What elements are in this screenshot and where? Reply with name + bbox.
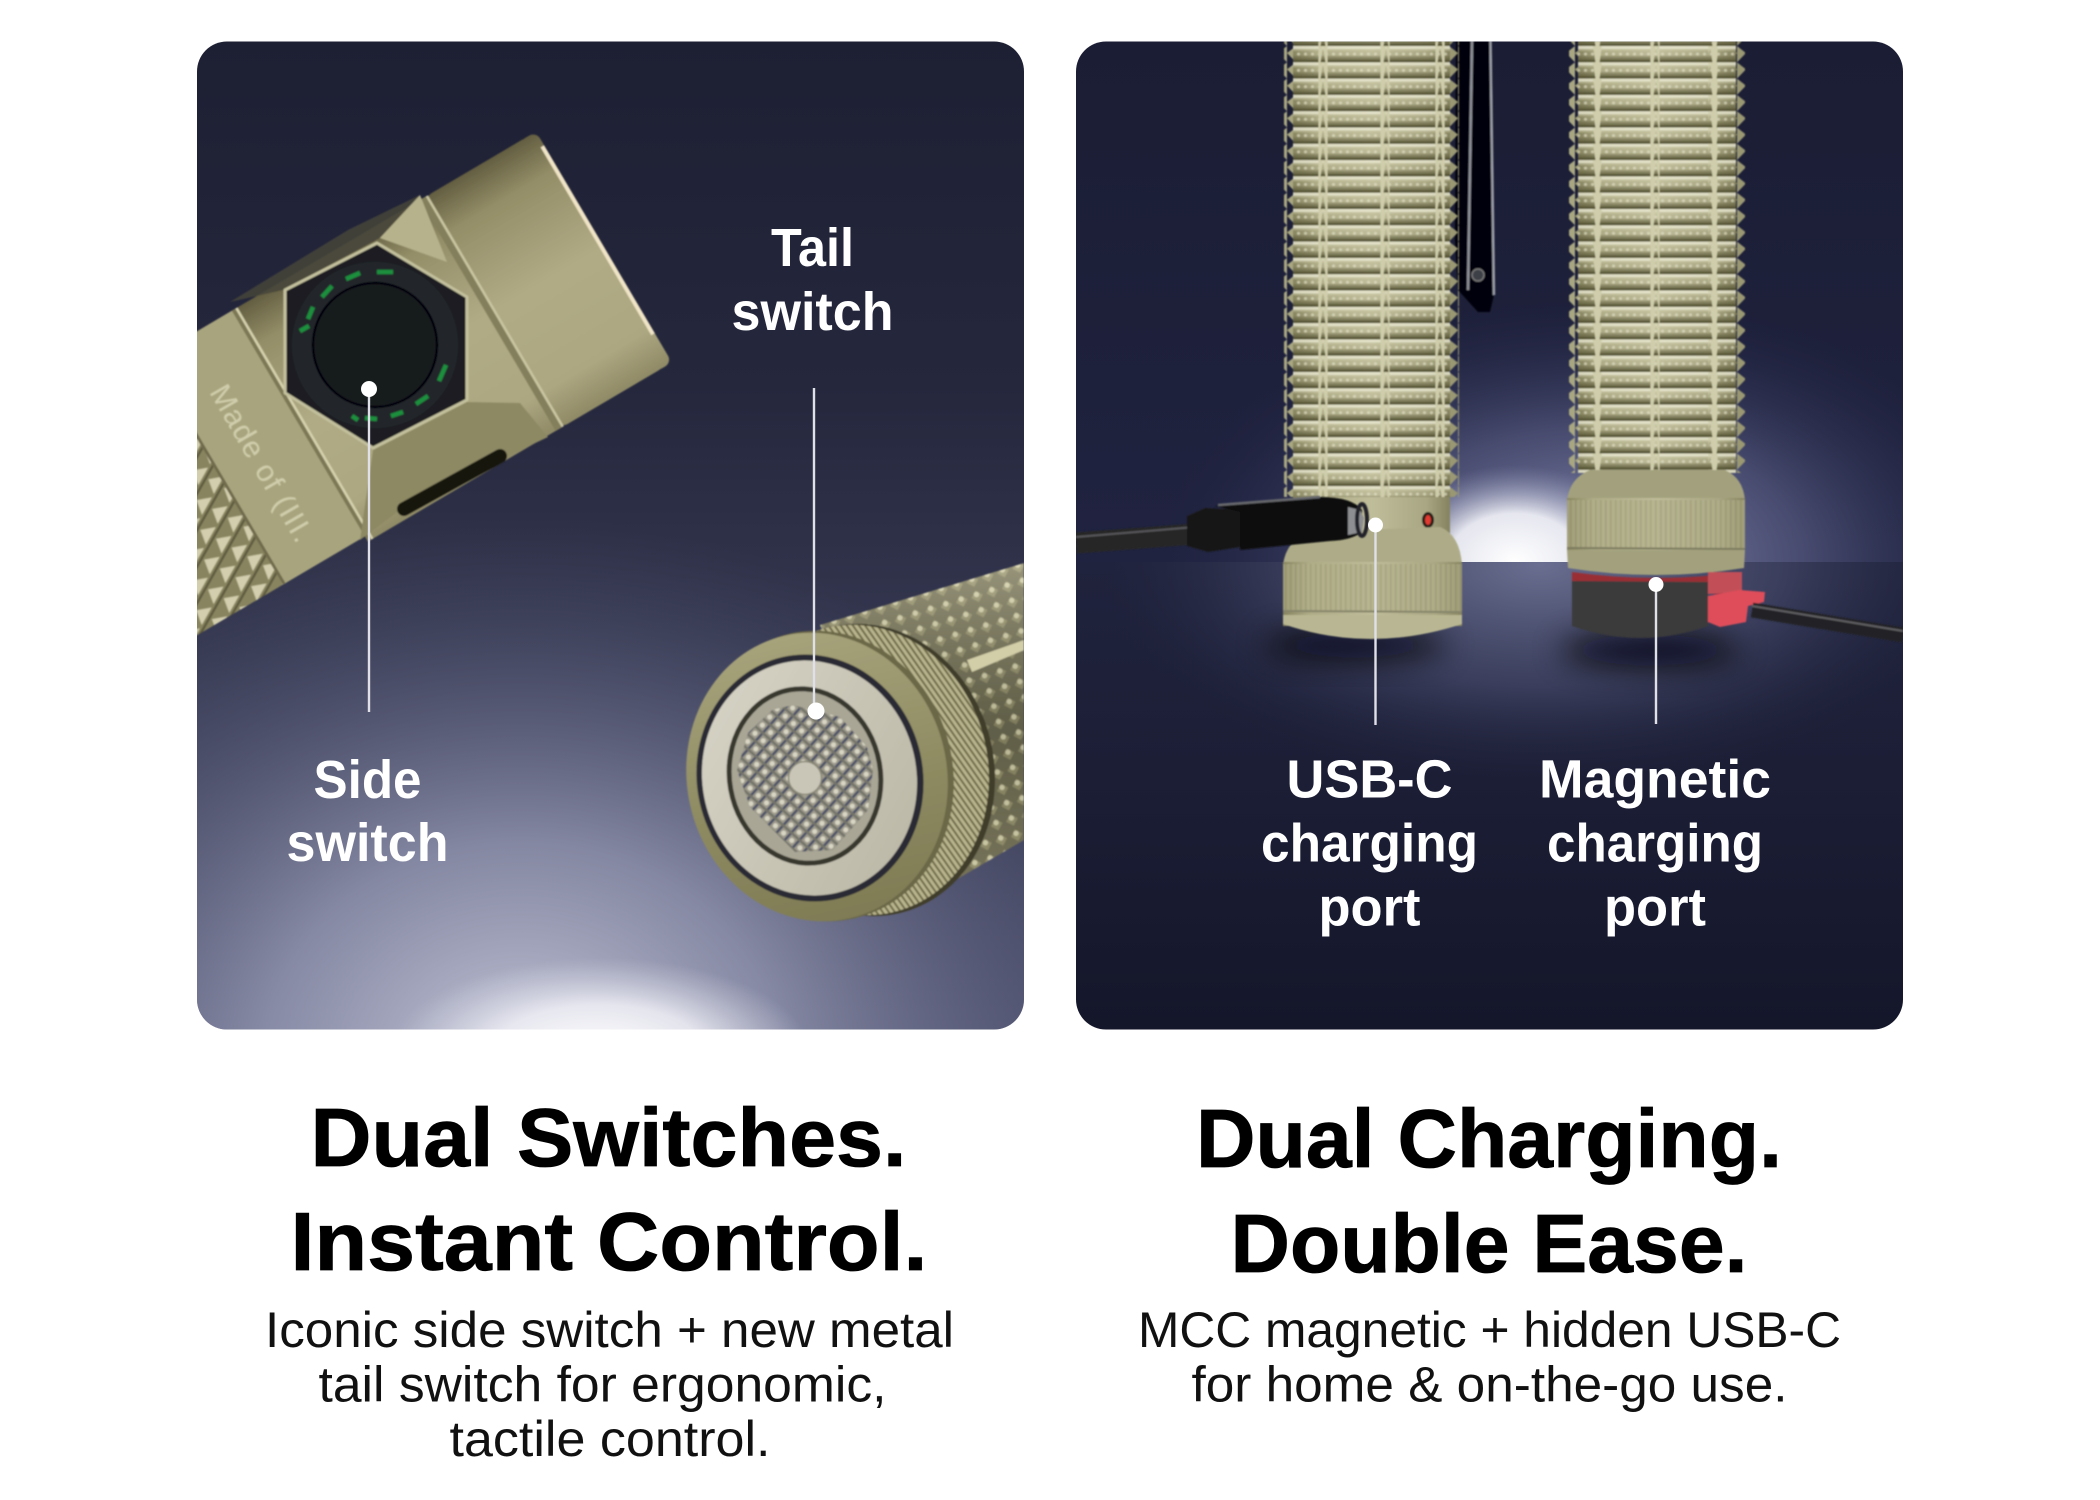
- label: USB-C charging port: charging: [1261, 814, 1478, 874]
- callout line: USB-C port: [1368, 518, 1383, 725]
- label: magnetic charging port: [1539, 750, 1771, 938]
- USB-C cable: [1076, 497, 1367, 552]
- red charging indicator: [1422, 512, 1434, 528]
- icon: textured tail button: [737, 705, 873, 852]
- pocket clip: [1455, 41, 1495, 312]
- label: tail switch: [733, 227, 890, 330]
- label: tail switch: switch: [732, 283, 894, 342]
- facet below switch: [360, 402, 548, 540]
- callout line: magnetic port: [1648, 577, 1664, 724]
- callout line: tail switch: [808, 388, 824, 720]
- dark pocket above switch: [230, 195, 420, 302]
- etched text on body: Made of (III.: [203, 379, 320, 548]
- heading: dual switches: Instant Control.: [290, 1195, 928, 1288]
- heading: dual charging: Dual Charging.: [1196, 1092, 1782, 1185]
- text block: dual switches description: tail switch for ergonomic,: [318, 1356, 886, 1412]
- heading: dual switches: [290, 1091, 928, 1288]
- magnetic charger base: [1571, 571, 1722, 595]
- facet above switch: [380, 195, 447, 262]
- text block: dual charging description: MCC magnetic + hidden USB-C: [1138, 1302, 1841, 1358]
- flashlight with USB-C port: [1283, 41, 1462, 639]
- icon: side switch hexagon: [285, 243, 467, 448]
- text block: dual charging description: [1138, 1302, 1841, 1412]
- label: tail switch: Tail: [771, 219, 854, 278]
- label: side switch: Side: [314, 751, 422, 810]
- text block: dual switches description: tactile control.: [450, 1411, 770, 1467]
- label: USB-C charging port: [1261, 750, 1478, 938]
- text block: dual charging description: for home & on-the-go use.: [1192, 1356, 1788, 1412]
- label: USB-C charging port: USB-C: [1286, 750, 1452, 810]
- text block: dual switches description: [265, 1302, 954, 1467]
- heading: dual charging: Double Ease.: [1230, 1197, 1748, 1290]
- heading: dual switches: Dual Switches.: [310, 1091, 906, 1184]
- slot in body: [404, 456, 500, 509]
- label: USB-C charging port: port: [1318, 878, 1421, 938]
- heading: dual charging: [1196, 1092, 1782, 1290]
- label: magnetic charging port: port: [1604, 878, 1706, 938]
- label: side switch: switch: [286, 814, 448, 873]
- flashlight head with side switch: [197, 134, 670, 636]
- flashlight with magnetic port: [1567, 41, 1903, 638]
- label: magnetic charging port: charging: [1547, 814, 1763, 874]
- label: magnetic charging port: Magnetic: [1539, 750, 1771, 810]
- panel: dual charging photo: [1076, 41, 1903, 1030]
- red magnetic connector: [1708, 590, 1765, 627]
- flashlight tail with tail switch: [686, 562, 1024, 922]
- label: side switch: [288, 759, 446, 862]
- text block: dual switches description: Iconic side switch + new metal: [265, 1302, 954, 1358]
- panel: dual switches photo: [197, 42, 1024, 1030]
- callout line: side switch: [361, 381, 377, 712]
